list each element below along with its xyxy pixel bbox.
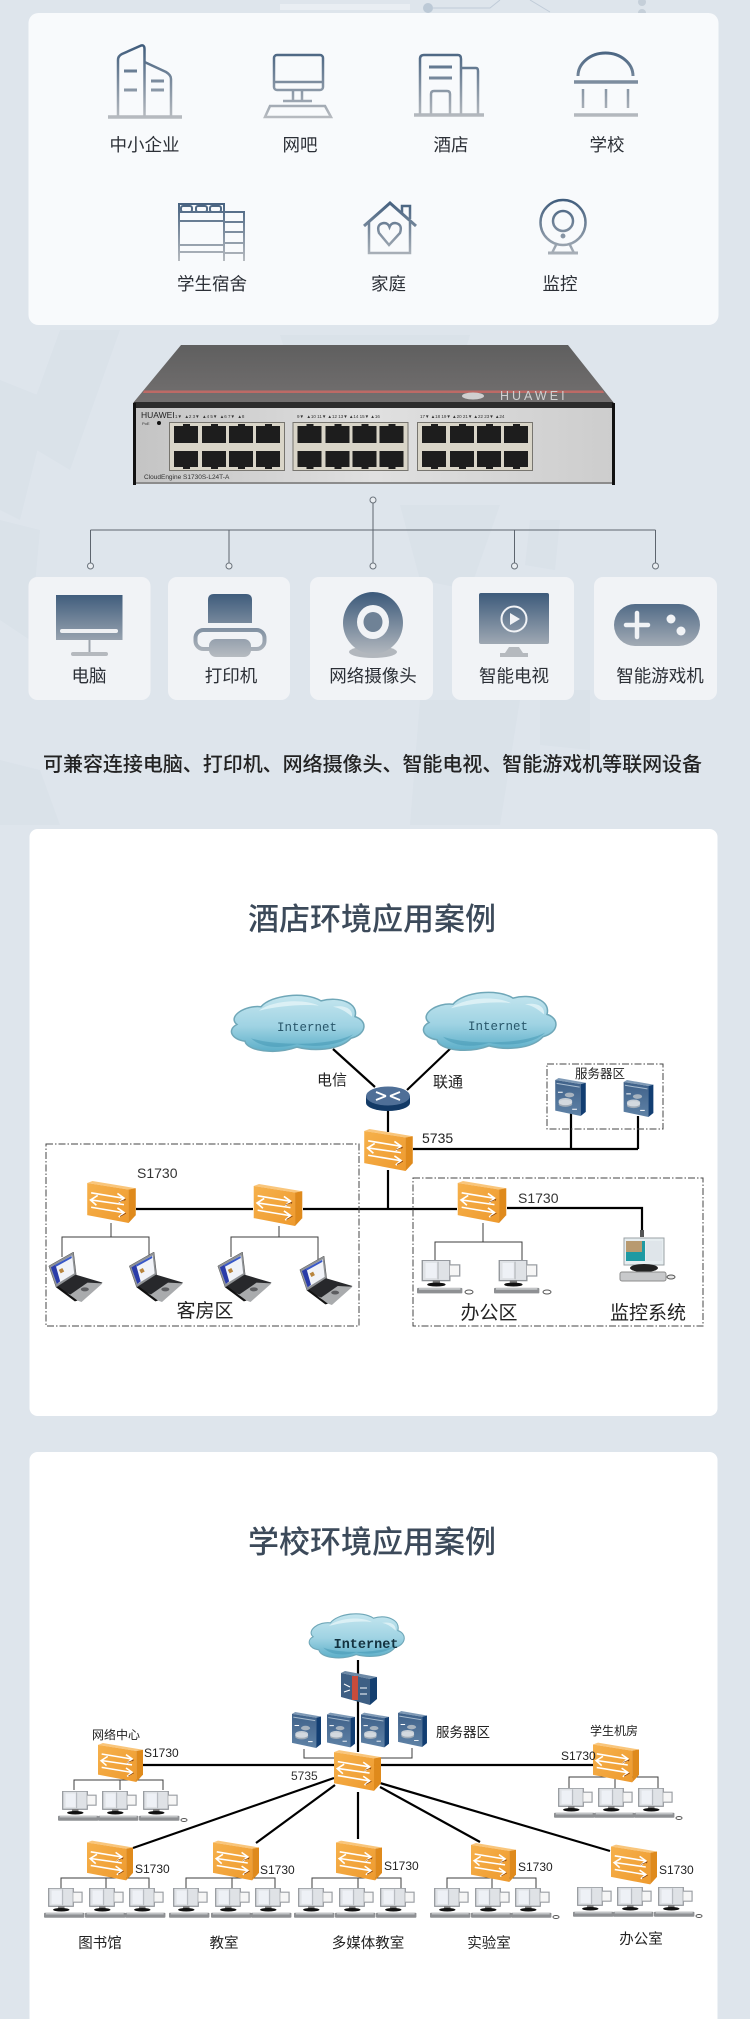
icon: internet cafe computer: [265, 55, 331, 117]
icon: enterprise building: [108, 45, 182, 117]
label: school: 学校: [590, 135, 624, 155]
group: school servers: [292, 1711, 490, 1748]
panel: school case: [30, 1452, 718, 2019]
product photo: network switch: PoE: [142, 421, 150, 426]
group: multimedia classroom: S1730: [384, 1859, 419, 1873]
card: webcam: [310, 577, 433, 700]
group: surveillance system: [610, 1230, 686, 1324]
heading: hotel case: 酒店环境应用案例: [248, 902, 496, 937]
label: telecom: 电信: [317, 1072, 347, 1089]
label: internet cafe: 网吧: [282, 135, 318, 155]
product photo: network switch: HUAWEI: [500, 389, 568, 403]
icon: gamepad: [614, 604, 700, 646]
icon: core switch 5735: [364, 1129, 413, 1171]
group: student computer room: 学生机房: [590, 1723, 638, 1738]
group: laboratory: S1730: [518, 1860, 553, 1874]
group: network center: S1730: [144, 1746, 179, 1760]
diagram: school network: [44, 1614, 702, 1952]
card: computer: [28, 577, 150, 700]
group: office: S1730: [659, 1863, 694, 1877]
group: network center: [58, 1727, 187, 1822]
group: student computer room: S1730: [561, 1749, 596, 1763]
group: school servers: 服务器区: [436, 1725, 490, 1740]
icon: bunk bed dormitory: [179, 204, 244, 261]
group: office zone: 办公区: [460, 1302, 518, 1324]
label: smart tv: 智能电视: [479, 666, 549, 686]
product photo: network switch: 17▼ ▲18 19▼ ▲20 21▼ ▲22 23▼ ▲24: [420, 414, 505, 419]
label: dormitory: 学生宿舍: [177, 274, 247, 294]
icon: computer monitor: [56, 595, 122, 656]
group: server zone: [555, 1066, 653, 1117]
product photo: network switch: CloudEngine S1730S-L24T-A: [144, 474, 230, 481]
group: library: 图书馆: [78, 1935, 122, 1952]
icon: router: [366, 1086, 410, 1111]
group: multimedia classroom: [294, 1841, 419, 1952]
heading: school case: 学校环境应用案例: [248, 1525, 496, 1560]
label: 5735: 5735: [422, 1130, 453, 1146]
card: smart tv: [452, 577, 574, 700]
label: unicom: 联通: [433, 1074, 463, 1091]
icon: smart tv: [479, 593, 549, 657]
icon: hotel: [414, 55, 484, 116]
group: office: 办公室: [619, 1931, 663, 1948]
cloud: internet: Internet: [334, 1638, 398, 1653]
cloud: internet: [309, 1614, 404, 1658]
group: classroom: [169, 1841, 295, 1952]
diagram: hotel network: [46, 992, 703, 1326]
group: library: [44, 1841, 170, 1952]
group: guest room zone: S1730: [137, 1165, 178, 1181]
group: multimedia classroom: 多媒体教室: [332, 1935, 404, 1952]
group: guest room zone: [49, 1165, 352, 1322]
group: library: S1730: [135, 1862, 170, 1876]
card: printer: [168, 577, 290, 700]
group: network center: 网络中心: [92, 1727, 140, 1742]
card: game console: [594, 577, 717, 700]
product photo: network switch: HUAWEI: [141, 410, 175, 420]
product photo: network switch: 1▼ ▲2 3▼ ▲4 5▼ ▲6 7▼ ▲8: [175, 414, 245, 419]
panel: hotel case: [30, 829, 718, 1416]
group: laboratory: 实验室: [467, 1935, 511, 1952]
label: webcam: 网络摄像头: [329, 666, 417, 686]
product photo: network switch: 9▼ ▲10 11▼ ▲12 13▼ ▲14 15▼ ▲16: [297, 414, 380, 419]
group: classroom: S1730: [260, 1863, 295, 1877]
product photo: network switch: [133, 345, 615, 485]
icon: core switch: [334, 1750, 381, 1791]
icon: printer: [196, 594, 264, 657]
group: guest room zone: 客房区: [176, 1300, 234, 1322]
caption: compatibility statement: 可兼容连接电脑、打印机、网络摄像头、智能电视、智能游戏机等联网设备: [43, 752, 702, 776]
label: home: 家庭: [371, 274, 406, 294]
connector tree: [88, 497, 658, 569]
label: 5735: 5735: [291, 1769, 318, 1783]
icon: school: [574, 53, 638, 115]
icon: webcam: [343, 592, 403, 658]
group: surveillance system: 监控系统: [610, 1302, 686, 1324]
icon: surveillance camera: [540, 200, 586, 253]
group: student computer room: [554, 1723, 682, 1820]
label: enterprise: 中小企业: [110, 135, 180, 155]
group: classroom: 教室: [210, 1935, 238, 1952]
label: computer: 电脑: [72, 666, 106, 686]
label: printer: 打印机: [205, 666, 258, 686]
group: office: [573, 1845, 702, 1948]
label: hotel: 酒店: [434, 135, 468, 155]
cloud: internet unicom: Internet: [468, 1020, 528, 1034]
group: laboratory: [430, 1843, 559, 1952]
group: server zone: 服务器区: [575, 1066, 625, 1081]
label: game console: 智能游戏机: [616, 666, 704, 686]
label: surveillance: 监控: [542, 274, 578, 294]
group: office zone: [417, 1181, 559, 1324]
cloud: internet telecom: Internet: [277, 1021, 337, 1035]
cloud: internet telecom: [231, 995, 364, 1051]
icon: firewall: [341, 1671, 377, 1705]
cloud: internet unicom: [423, 992, 556, 1050]
group: office zone: S1730: [518, 1190, 559, 1206]
panel: application scenarios: [28, 13, 718, 325]
icon: home: [364, 203, 416, 253]
